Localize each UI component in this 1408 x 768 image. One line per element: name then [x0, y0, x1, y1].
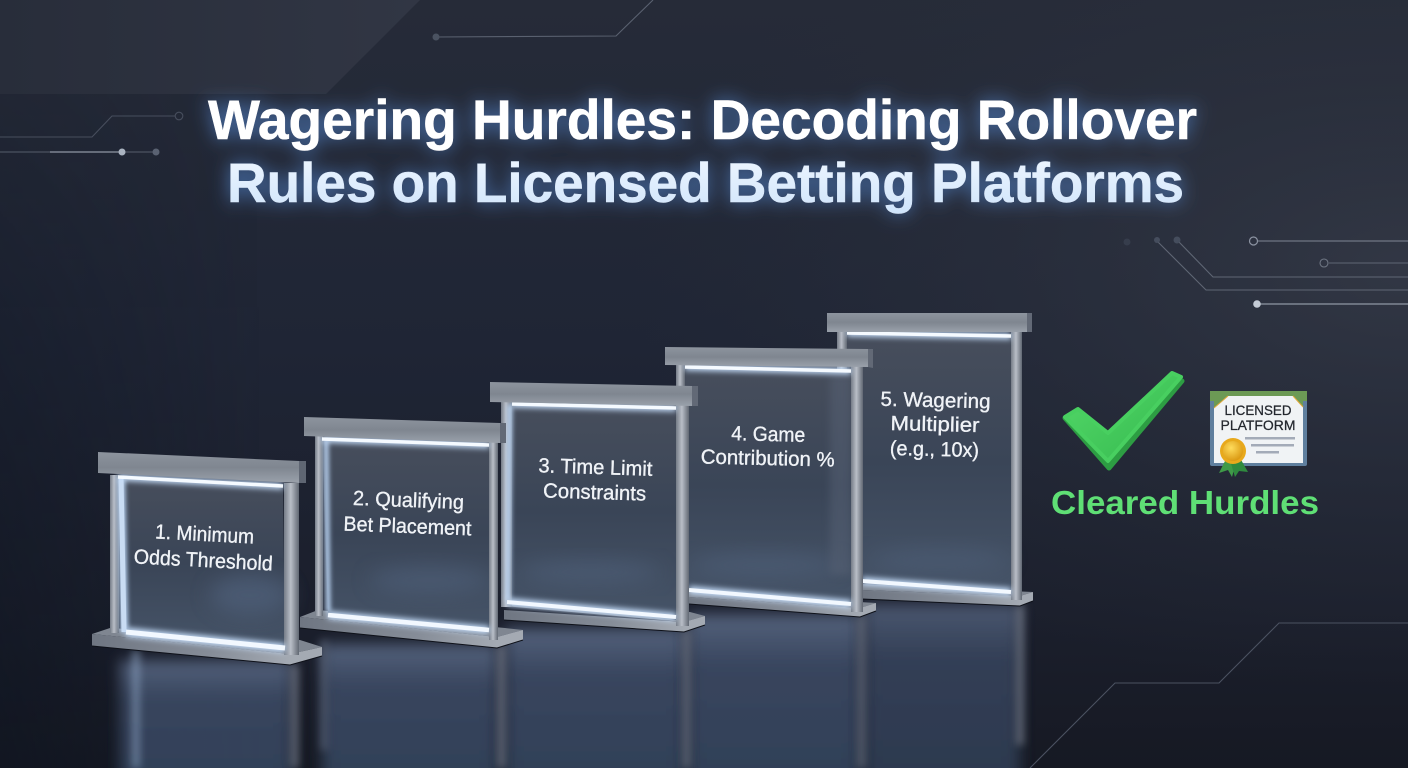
label: wagering multiplier: Multiplier [890, 412, 980, 437]
circuit lines: left [0, 112, 183, 156]
hurdle 3 [490, 382, 705, 632]
title [208, 88, 1197, 214]
label: qualifying bet placement: Bet Placement [343, 513, 472, 540]
label: game contribution: Contribution % [700, 445, 835, 472]
label: time limit constraints: Constraints [543, 479, 646, 506]
hurdle 4 [665, 347, 876, 617]
glass panel [685, 366, 851, 606]
hurdle 2 [300, 417, 523, 648]
title: Rules on Licensed Betting Platforms [227, 151, 1184, 214]
label: wagering multiplier: (e.g., 10x) [890, 437, 979, 462]
circuit lines: top centre [432, 0, 653, 40]
circuit lines: bottom right [1030, 623, 1408, 768]
floor reflections [120, 604, 1024, 768]
hurdle 5 [827, 313, 1033, 606]
label: game contribution: 4. Game [731, 422, 806, 447]
hurdle 1 [92, 452, 322, 665]
icon: licensed platform certificate [1210, 391, 1307, 477]
label: wagering multiplier: 5. Wagering [880, 388, 991, 413]
label: qualifying bet placement: 2. Qualifying [353, 487, 464, 514]
cleared hurdles label: Cleared Hurdles [1051, 484, 1319, 521]
icon: green check mark [1065, 373, 1182, 468]
title: Wagering Hurdles: Decoding Rollover [208, 88, 1197, 151]
label: minimum odds threshold: Odds Threshold [133, 545, 273, 576]
certificate text: PLATFORM [1220, 417, 1296, 433]
label: time limit constraints: 3. Time Limit [538, 454, 653, 481]
certificate text: LICENSED [1224, 402, 1292, 418]
glass panel [507, 403, 676, 620]
glass panel [118, 477, 285, 650]
glass panel [847, 332, 1011, 593]
label: minimum odds threshold: 1. Minimum [155, 520, 255, 549]
glass panel [322, 438, 489, 631]
circuit lines: right [1124, 236, 1408, 308]
